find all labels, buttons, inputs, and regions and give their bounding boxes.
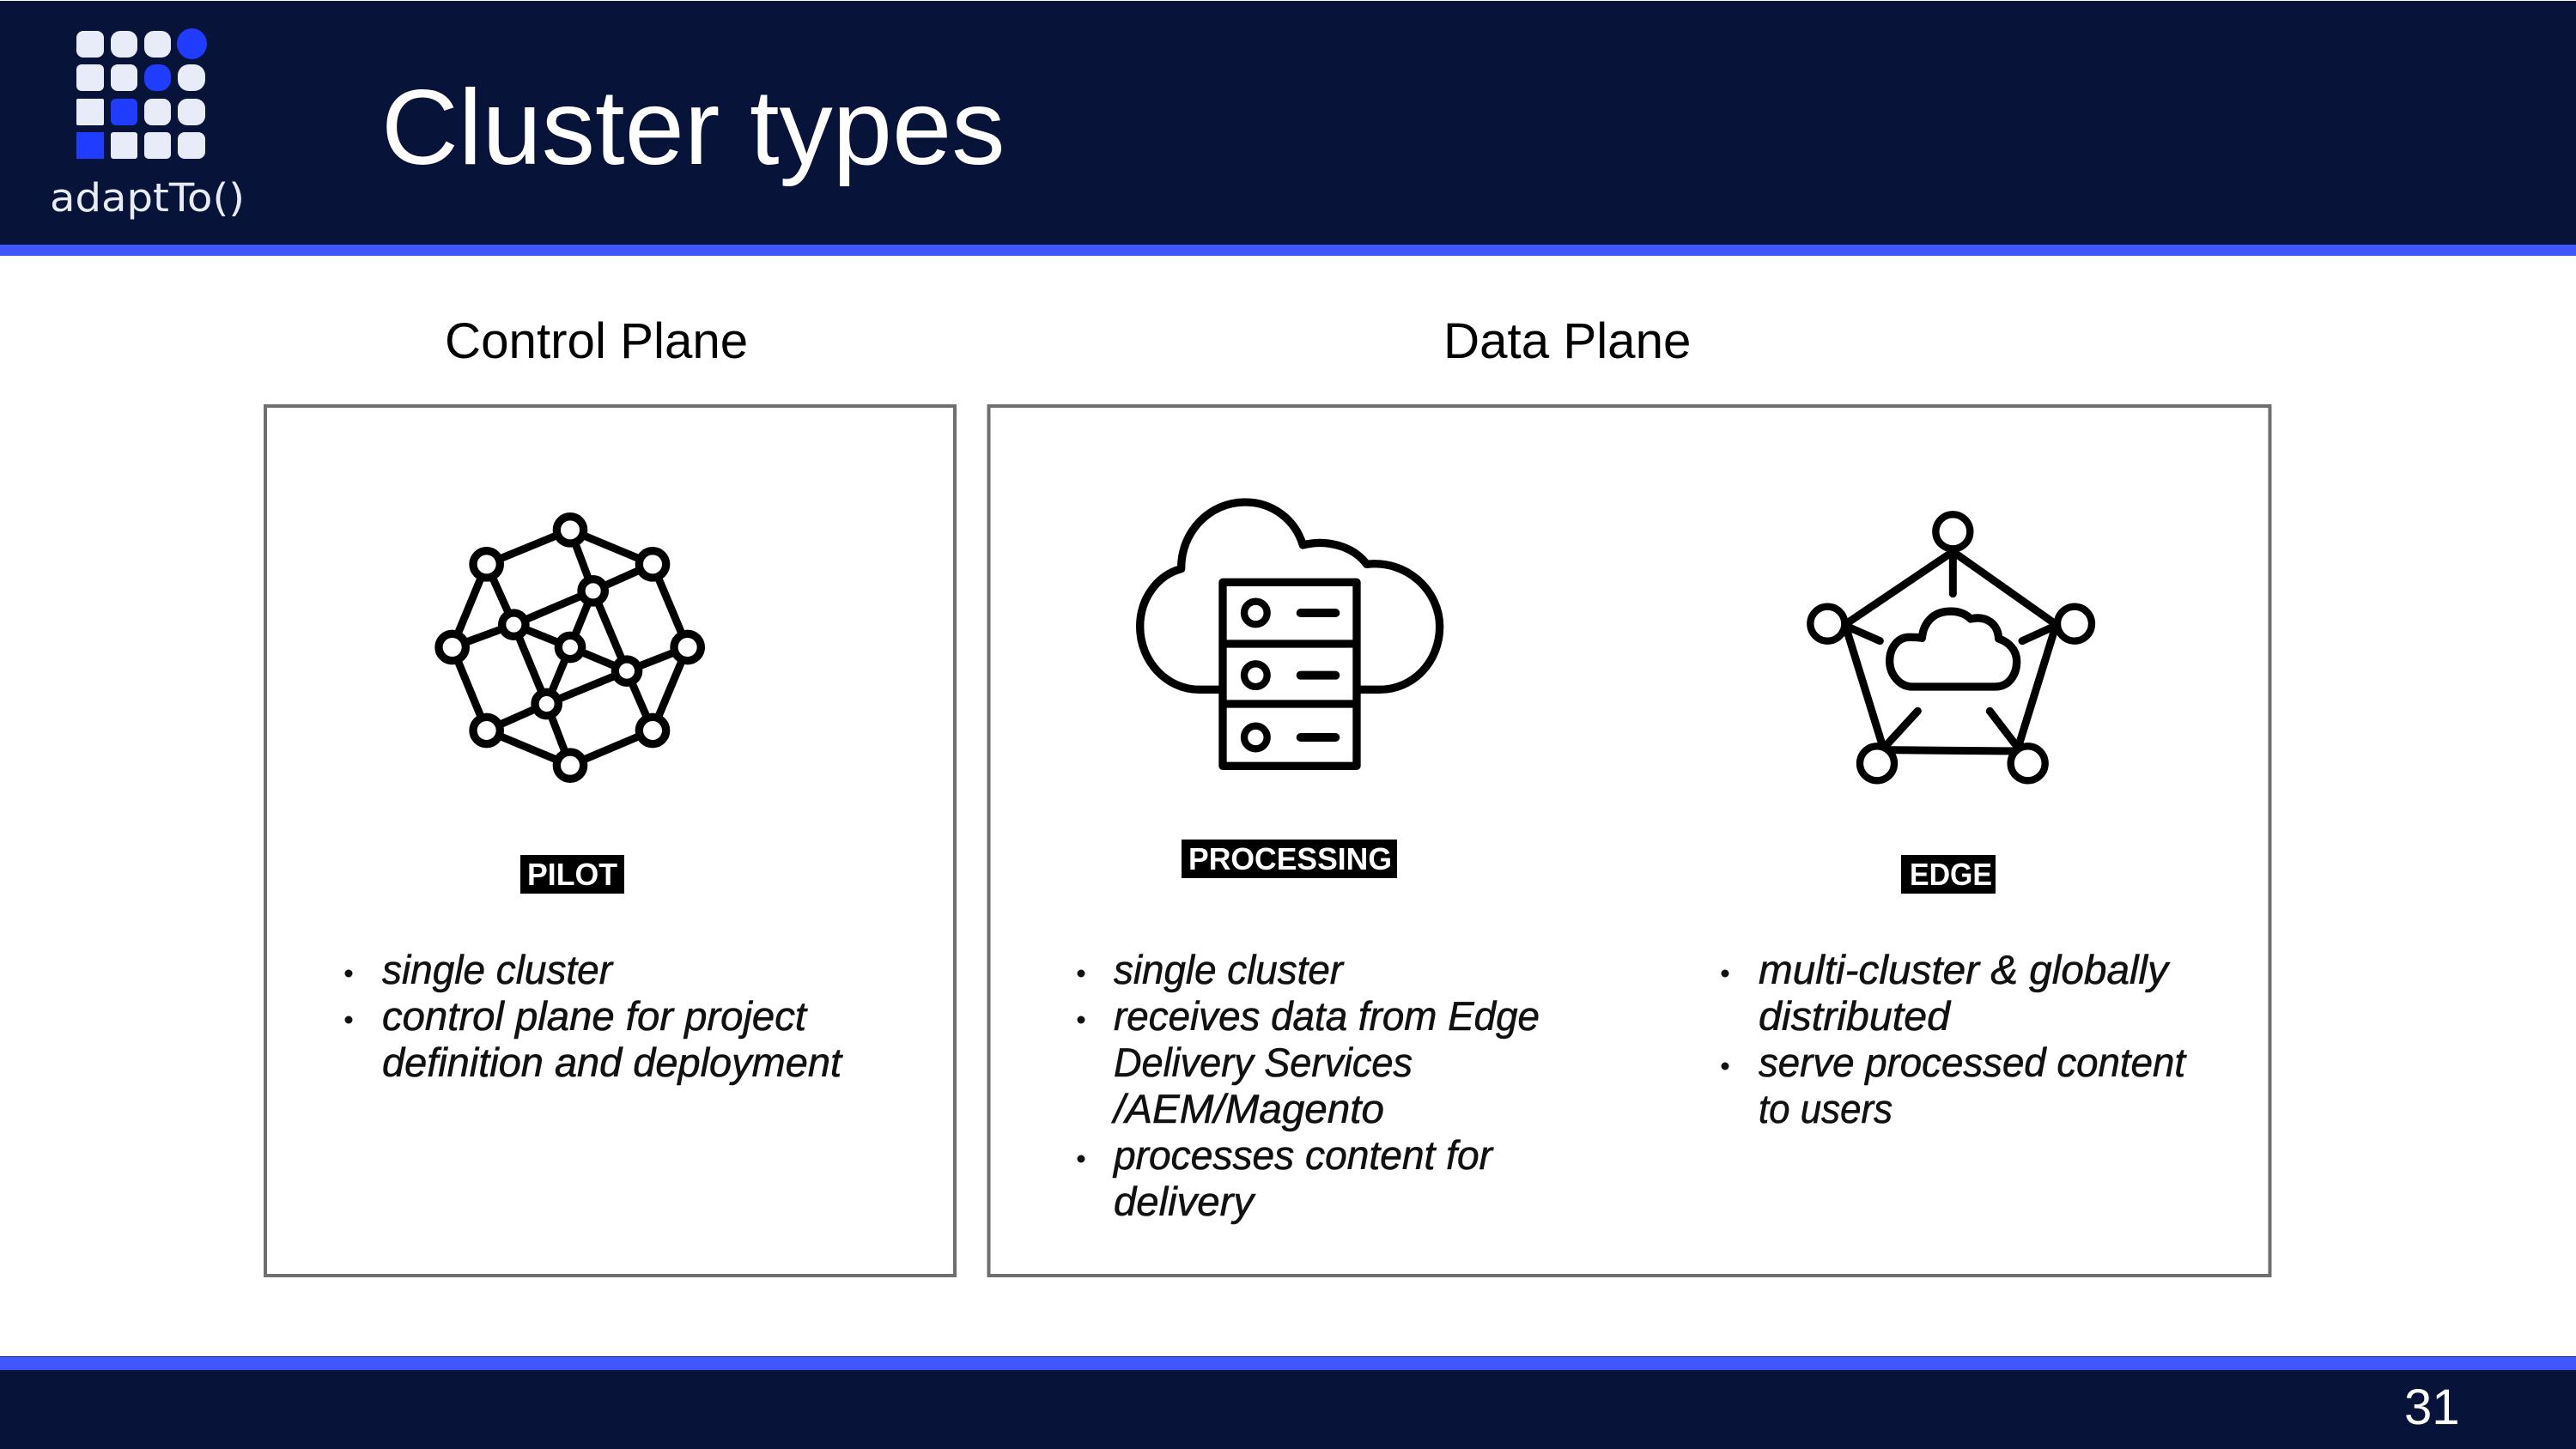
list: pilot description xyxy=(345,947,843,1085)
icon: logo dot grid xyxy=(76,28,207,159)
list: edge description: distributed xyxy=(1759,993,1952,1039)
icon: pilot network xyxy=(439,517,701,779)
list: pilot description: single cluster xyxy=(382,947,614,992)
list: edge description: serve processed content xyxy=(1759,1040,2187,1085)
label: EDGE: EDGE xyxy=(1910,857,1992,892)
label: PROCESSING: PROCESSING xyxy=(1188,841,1392,876)
logo: adaptTo() xyxy=(50,28,245,221)
label: PILOT: PILOT xyxy=(527,857,617,892)
list: processing description: Delivery Services xyxy=(1114,1040,1413,1085)
panel: control plane xyxy=(265,406,955,1276)
page number: 31 xyxy=(2404,1379,2460,1435)
list: processing description: delivery xyxy=(1114,1179,1256,1224)
logo wordmark: adaptTo() xyxy=(50,175,245,221)
list: processing description xyxy=(1077,947,1540,1224)
list: processing description: receives data from Edge xyxy=(1114,993,1540,1039)
list: edge description: multi-cluster & globally xyxy=(1759,947,2171,992)
icon: edge network cloud xyxy=(1810,514,2092,780)
heading: Control Plane: Control Plane xyxy=(445,313,748,369)
header band xyxy=(0,1,2576,256)
panel: data plane xyxy=(989,406,2270,1276)
heading: Data Plane: Data Plane xyxy=(1443,313,1691,369)
title: Cluster types xyxy=(381,68,1005,187)
list: processing description: /AEM/Magento xyxy=(1111,1086,1384,1131)
list: pilot description: definition and deployment xyxy=(382,1040,843,1085)
list: processing description: single cluster xyxy=(1114,947,1345,992)
list: processing description: processes content for xyxy=(1112,1132,1494,1178)
list: edge description: to users xyxy=(1759,1086,1893,1131)
footer band xyxy=(0,1356,2576,1449)
list: pilot description: control plane for project xyxy=(382,993,808,1039)
icon: processing cloud server xyxy=(1140,502,1440,766)
list: edge description xyxy=(1721,947,2187,1131)
